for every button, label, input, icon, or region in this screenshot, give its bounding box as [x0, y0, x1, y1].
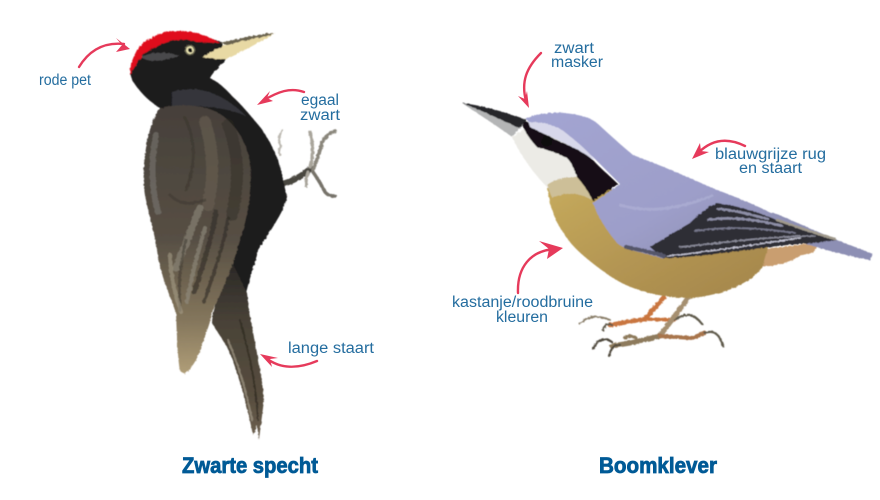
arrow: egaal zwart: [257, 90, 304, 105]
nuthatch wing feathers: [620, 196, 835, 256]
nuthatch undertail: [755, 243, 817, 266]
annotation: kastanje: [452, 241, 593, 326]
label: lange staart: lange staart: [288, 340, 375, 357]
nuthatch beak: [462, 103, 526, 137]
nuthatch white cheek: [512, 125, 592, 188]
label: kastanje: kastanje/roodbruine: [452, 294, 593, 311]
heading: boomklever: Boomklever: [599, 453, 717, 478]
arrow: blauwgrijze rug: [692, 141, 745, 159]
label: kastanje: kleuren: [496, 309, 548, 326]
nuthatch legs and feet: [580, 297, 723, 356]
nuthatch wing: [650, 203, 837, 258]
woodpecker tail: [212, 262, 264, 440]
heading: zwarte specht: Zwarte specht: [182, 453, 319, 478]
arrow: zwart masker: [518, 53, 541, 108]
illustration: nuthatch: [462, 103, 873, 356]
woodpecker eye: [185, 45, 195, 55]
nuthatch back: [526, 113, 790, 258]
illustration: black woodpecker: [130, 31, 335, 440]
woodpecker foot: [279, 130, 335, 196]
woodpecker red cap: [130, 31, 220, 75]
nuthatch pale eyebrow: [528, 122, 595, 160]
woodpecker head highlight: [141, 53, 180, 61]
panel: boomklever: [452, 40, 873, 478]
annotation: rode pet: [39, 38, 130, 89]
panel: zwarte specht: [39, 31, 375, 478]
arrow: kastanje: [518, 241, 563, 293]
nuthatch black mask: [520, 120, 618, 201]
nuthatch throat shading: [547, 177, 592, 200]
woodpecker neck sheen: [172, 89, 246, 116]
woodpecker tail streaks: [228, 320, 258, 420]
annotation: egaal zwart: [257, 90, 341, 124]
nuthatch tail: [770, 212, 873, 260]
arrow: rode pet: [79, 38, 130, 67]
label: zwart masker: zwart: [554, 40, 595, 57]
woodpecker feather marks: [152, 118, 237, 312]
label: zwart masker: masker: [551, 54, 603, 71]
annotation: zwart masker: [518, 40, 603, 108]
annotation: lange staart: [260, 340, 375, 367]
arrow: lange staart: [260, 354, 317, 367]
woodpecker body: [130, 32, 287, 298]
nuthatch belly: [547, 170, 770, 298]
label: egaal zwart: zwart: [300, 107, 341, 124]
woodpecker wing: [144, 105, 251, 374]
woodpecker beak: [202, 33, 275, 59]
nuthatch eye: [542, 136, 552, 146]
label: egaal zwart: egaal: [301, 92, 339, 109]
label: rode pet: rode pet: [39, 72, 92, 89]
annotation: blauwgrijze rug: [692, 141, 826, 177]
label: blauwgrijze rug: blauwgrijze rug: [715, 146, 826, 163]
label: blauwgrijze rug: en staart: [739, 160, 803, 177]
